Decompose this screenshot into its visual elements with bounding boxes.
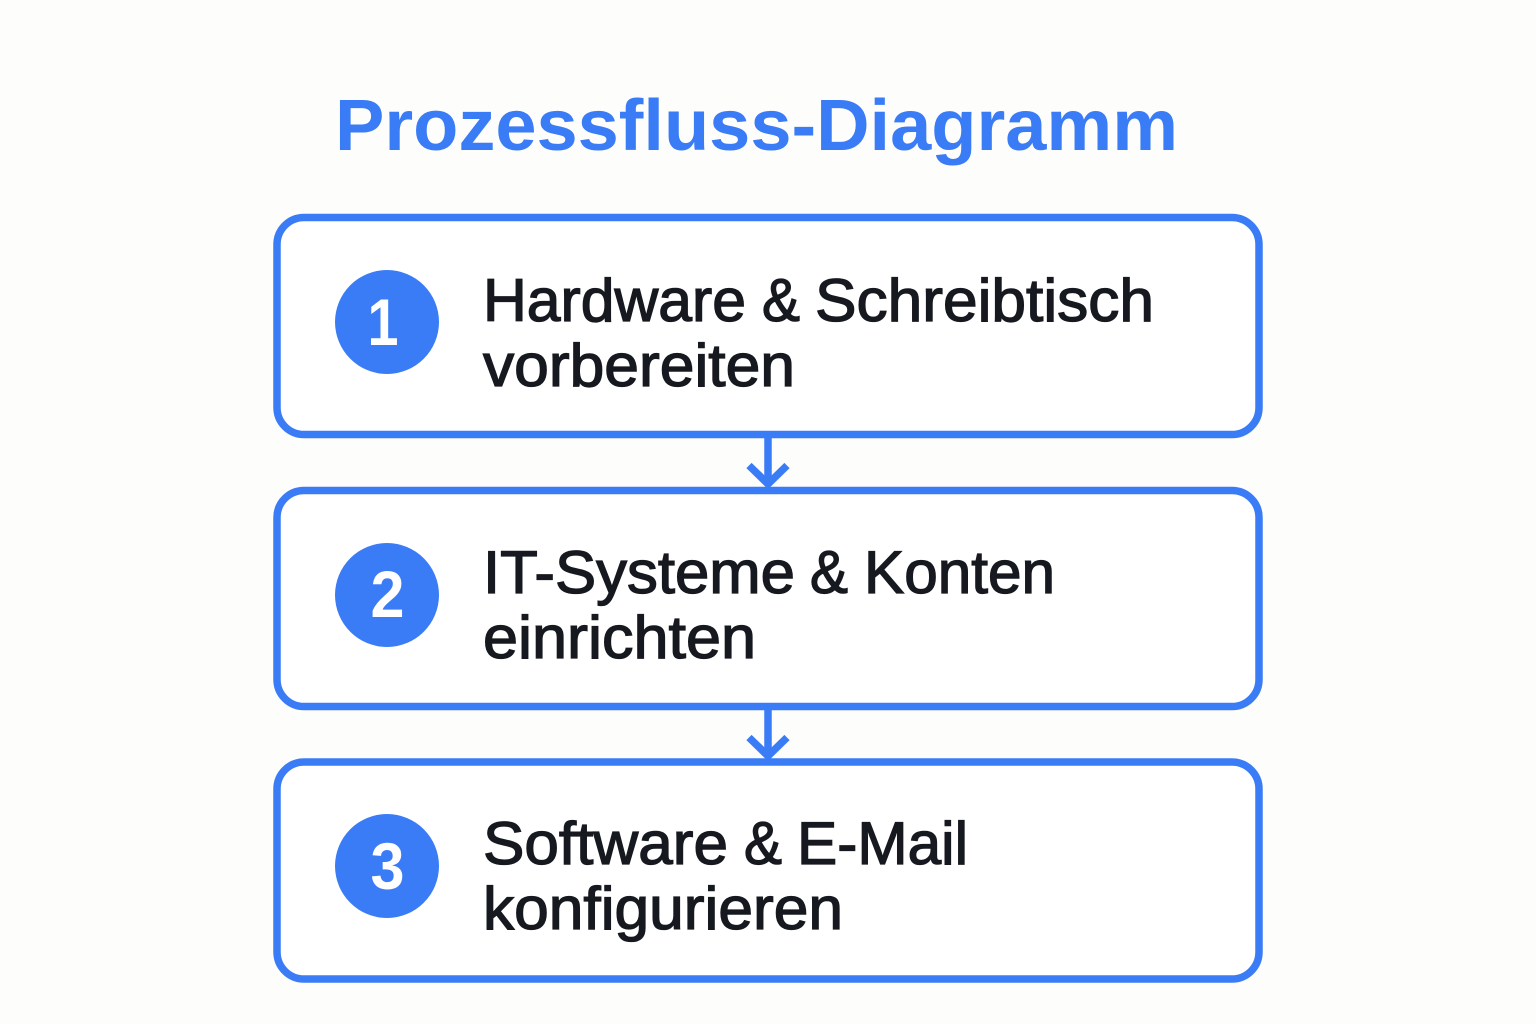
icon: number 3	[335, 814, 439, 918]
step 2 text: IT-Systeme	[483, 539, 795, 606]
step 3 text	[483, 810, 968, 942]
step 1 text	[483, 267, 1154, 399]
step 1 text: Schreibtisch	[815, 267, 1154, 334]
step 3 text: Software	[483, 810, 728, 877]
step 3 text: E-Mail	[797, 810, 968, 877]
icon: number 1: 1	[368, 285, 398, 359]
step 1 text: &	[762, 267, 800, 334]
panel: step 2	[277, 490, 1259, 706]
step 2 text: &	[810, 539, 848, 606]
step 2 text: einrichten	[483, 604, 756, 671]
step 3 text: konfigurieren	[483, 875, 843, 942]
icon: number 2	[335, 543, 439, 647]
step 2 text	[483, 539, 1055, 671]
arrow: step 2 to 3	[749, 708, 787, 756]
step 3 text: &	[744, 810, 782, 877]
step 1 text: Hardware	[483, 267, 746, 334]
title: Prozessfluss-Diagramm	[335, 86, 1178, 166]
icon: number 2: 2	[370, 557, 404, 631]
icon: number 1	[335, 270, 439, 374]
panel: step 1	[277, 218, 1259, 434]
icon: number 3: 3	[370, 829, 404, 903]
step 1 text: vorbereiten	[483, 332, 795, 399]
panel: step 3	[277, 762, 1259, 979]
step 2 text: Konten	[864, 539, 1055, 606]
arrow: step 1 to 2	[749, 436, 787, 484]
